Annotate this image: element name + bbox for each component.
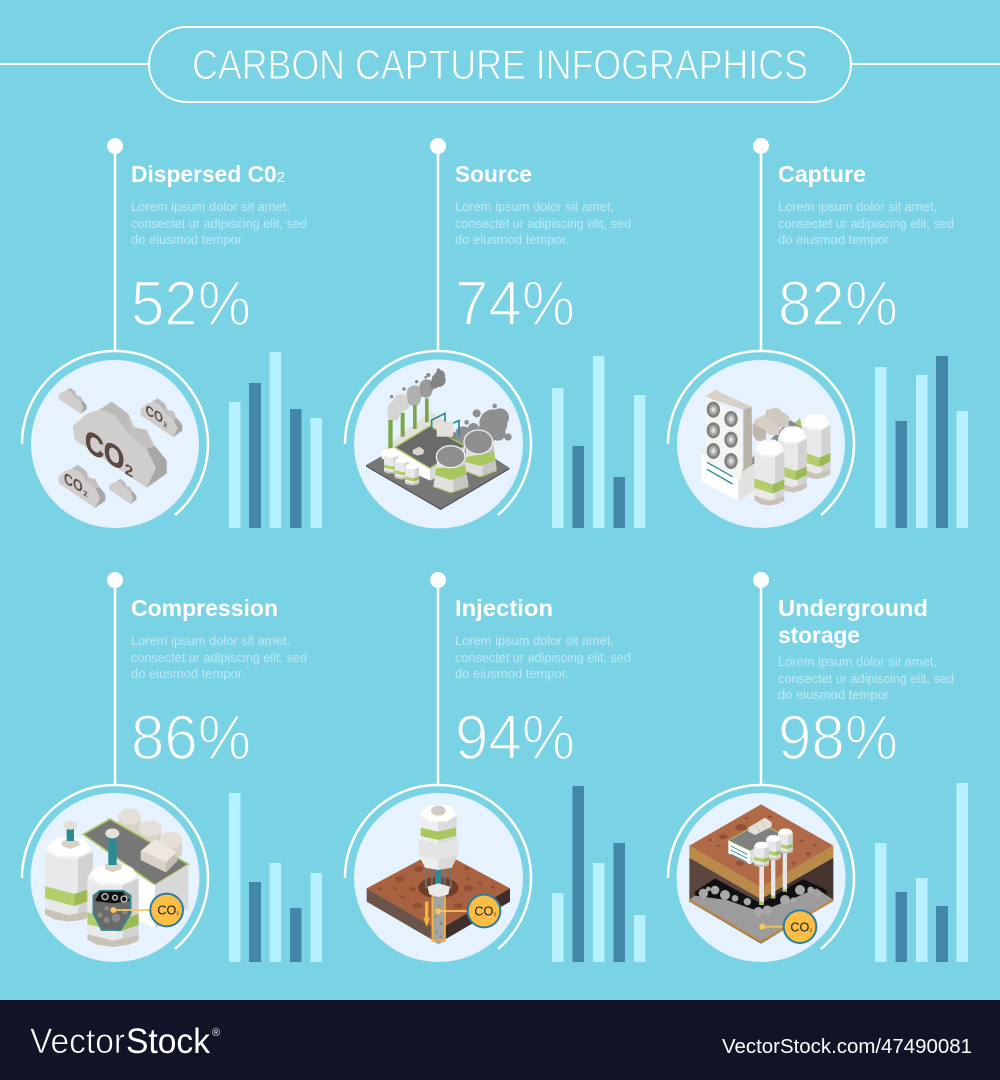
percentage: 86% — [131, 703, 251, 773]
description — [131, 200, 307, 247]
heading: Dispersed C02 — [131, 161, 285, 187]
bar chart — [229, 352, 322, 528]
percentage: 74% — [455, 269, 575, 339]
heading — [778, 595, 928, 648]
header: title pill: CARBON CAPTURE INFOGRAPHICS — [192, 41, 808, 88]
circle illustration: capture plant — [668, 351, 854, 528]
bar chart — [229, 793, 322, 962]
bar chart — [552, 786, 646, 962]
CO2 badge — [110, 894, 183, 926]
description: do eiusmod tempor. — [131, 667, 245, 681]
circle illustration: CO2 clouds: CO — [85, 422, 124, 478]
CO2 badge: CO2 — [790, 920, 812, 934]
CO2 badge: CO2 — [474, 905, 496, 919]
percentage: 98% — [778, 703, 898, 773]
panel: Compression — [22, 572, 322, 962]
footer bar — [0, 1000, 1000, 1080]
description — [455, 200, 631, 247]
description — [455, 634, 631, 681]
circle illustration: underground storage — [668, 785, 854, 962]
circle illustration: CO2 clouds: 2 — [83, 488, 88, 499]
circle illustration: power plant — [345, 351, 531, 528]
description: Lorem ipsum dolor sit amet, — [455, 634, 614, 648]
circle illustration: CO2 clouds: 2 — [163, 420, 167, 430]
percentage: 52% — [131, 269, 251, 339]
timeline connector — [753, 572, 769, 785]
description: consectet ur adipiscing elit, sed — [455, 217, 631, 231]
circle illustration: CO2 clouds — [22, 351, 208, 528]
circle illustration: CO2 clouds: CO — [64, 470, 83, 497]
description: do eiusmod tempor. — [131, 233, 245, 247]
description: consectet ur adipiscing elit, sed — [131, 217, 307, 231]
footer bar: Vector — [30, 1022, 125, 1061]
footer bar: ® — [212, 1027, 220, 1039]
bar chart — [875, 356, 968, 528]
circle illustration: CO2 clouds: 2 — [125, 460, 133, 482]
timeline connector — [107, 572, 123, 785]
timeline connector — [430, 138, 446, 351]
header: title pill — [0, 27, 1000, 102]
heading: storage — [778, 622, 860, 648]
circle illustration: compression tanks — [22, 785, 208, 962]
timeline connector — [753, 138, 769, 351]
heading: Underground — [778, 595, 928, 621]
circle illustration: injection well — [345, 785, 531, 962]
description — [778, 655, 954, 702]
description — [778, 200, 954, 247]
panel: Underground storage — [668, 572, 968, 962]
timeline connector — [107, 138, 123, 351]
description: consectet ur adipiscing elit, sed — [778, 217, 954, 231]
bar chart — [875, 783, 968, 962]
footer bar: VectorStock.com/47490081 — [722, 1036, 972, 1058]
description: do eiusmod tempor. — [778, 688, 892, 702]
panel: Injection — [345, 572, 646, 962]
bar chart — [552, 356, 646, 528]
panel: Dispersed CO2 — [22, 138, 322, 528]
description: consectet ur adipiscing elit, sed — [455, 651, 631, 665]
CO2 badge — [435, 895, 500, 927]
timeline connector — [430, 572, 446, 785]
description: Lorem ipsum dolor sit amet, — [131, 634, 290, 648]
description: Lorem ipsum dolor sit amet, — [455, 200, 614, 214]
CO2 badge: CO2 — [157, 904, 179, 918]
panel: Capture — [668, 138, 968, 528]
panel: Source — [345, 138, 646, 528]
heading: Compression — [131, 595, 278, 621]
heading: Source — [455, 161, 532, 187]
description: Lorem ipsum dolor sit amet, — [778, 200, 937, 214]
description: consectet ur adipiscing elit, sed — [131, 651, 307, 665]
description: Lorem ipsum dolor sit amet, — [778, 655, 937, 669]
percentage: 82% — [778, 269, 898, 339]
CO2 badge — [759, 910, 816, 943]
circle illustration: CO2 clouds: CO — [146, 402, 163, 427]
description: Lorem ipsum dolor sit amet, — [131, 200, 290, 214]
heading: Capture — [778, 161, 866, 187]
heading: Injection — [455, 595, 553, 621]
description: do eiusmod tempor. — [455, 667, 569, 681]
description: consectet ur adipiscing elit, sed — [778, 672, 954, 686]
description — [131, 634, 307, 681]
description: do eiusmod tempor. — [778, 233, 892, 247]
percentage: 94% — [455, 703, 575, 773]
description: do eiusmod tempor. — [455, 233, 569, 247]
footer bar: Stock — [126, 1022, 210, 1061]
